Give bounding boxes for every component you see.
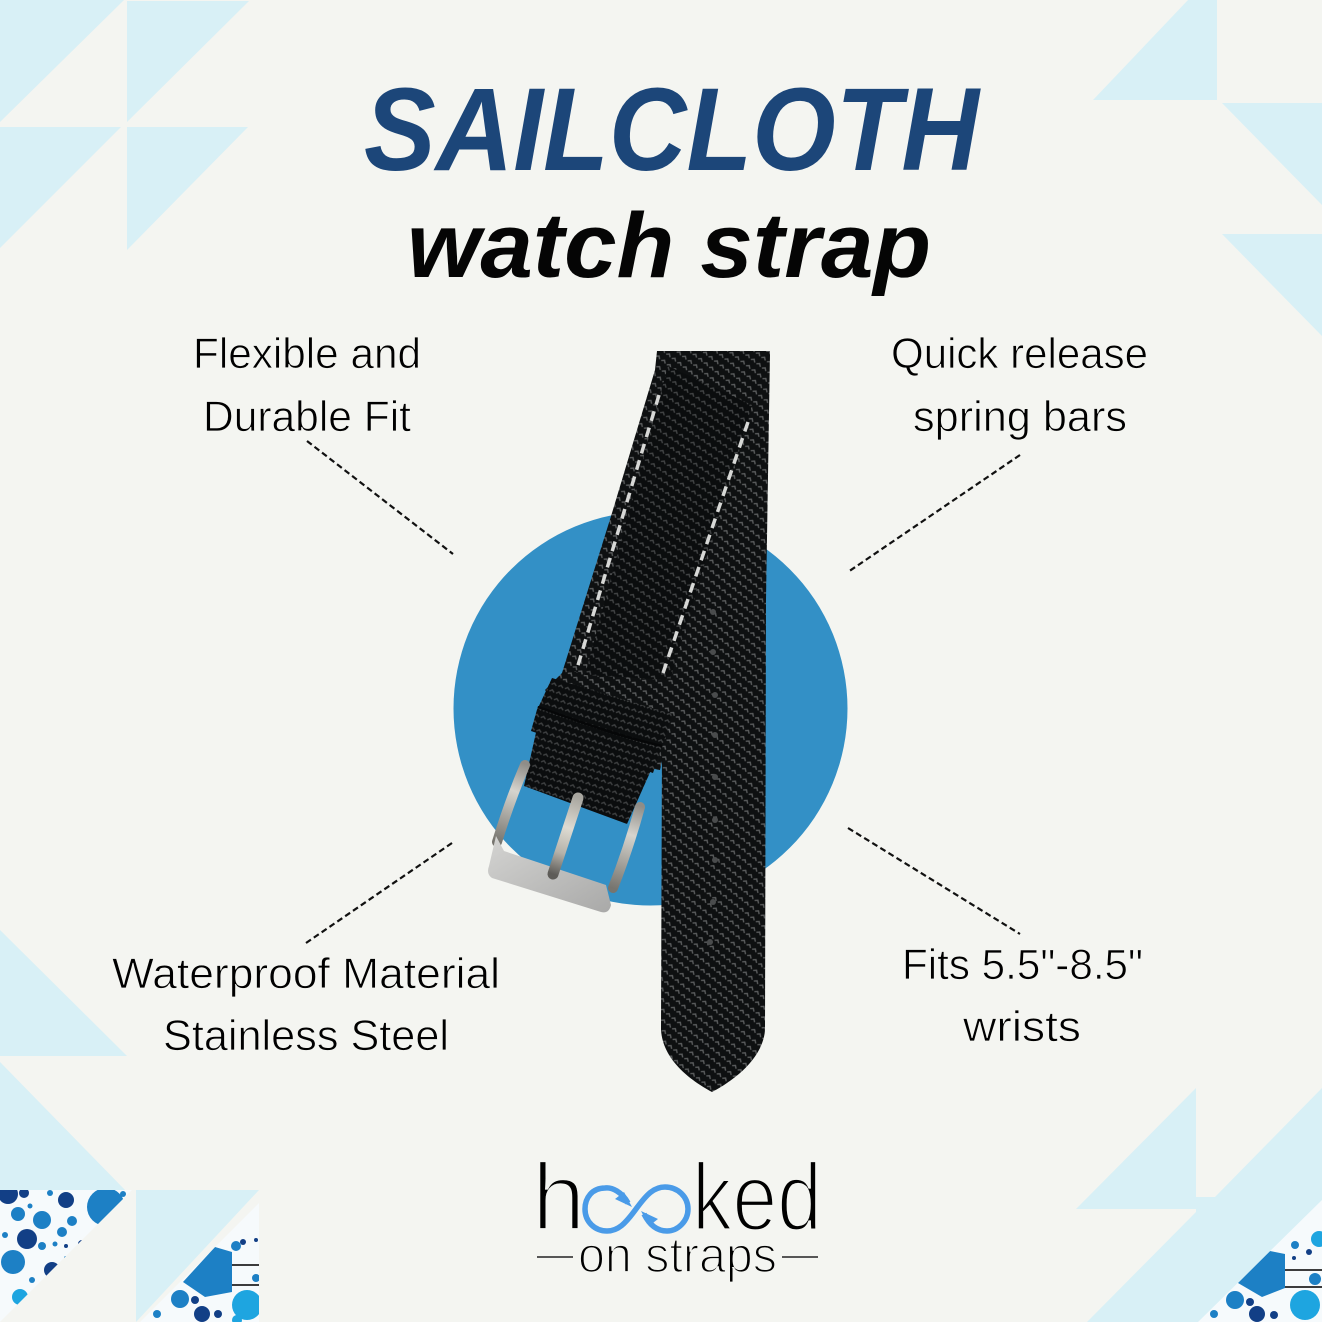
- strap holes: [707, 609, 718, 945]
- leader line: flexible: [307, 441, 453, 554]
- logo wordmark h: h: [532, 1144, 585, 1251]
- callout: waterproof material stainless steel: [112, 950, 500, 1060]
- callout: quick release spring bars: spring bars: [913, 393, 1127, 441]
- darker inner panel: [585, 366, 752, 680]
- buckle left bar: [497, 765, 525, 842]
- paint splatter: bottom left corner: [0, 1184, 132, 1322]
- folded strap piece: [545, 351, 770, 770]
- buckle: [488, 765, 640, 912]
- callout: quick release spring bars: Quick release: [891, 330, 1148, 378]
- title: SAILCLOTH: [364, 64, 982, 196]
- logo infinity hook: [585, 1187, 688, 1231]
- leader line: waterproof: [306, 843, 452, 943]
- callout: quick release spring bars: [891, 330, 1148, 441]
- callout: fits wrists: [902, 941, 1143, 1051]
- contrast stitching: [576, 395, 748, 676]
- quilt triangles: top right: [1093, 0, 1322, 336]
- buckle back plate: [488, 836, 611, 912]
- lower keeper: [531, 706, 662, 773]
- quilt triangles: bottom right: [1076, 1088, 1322, 1322]
- logo rule right: [782, 1256, 818, 1258]
- logo rule left: [537, 1256, 573, 1258]
- callout: waterproof material stainless steel: Stainless Steel: [163, 1012, 449, 1060]
- blue circle behind strap: [454, 512, 848, 906]
- quilt triangles: top left: [0, 0, 249, 250]
- quilt triangles: bottom left: [0, 930, 259, 1322]
- logo tagline: on straps: [578, 1227, 777, 1283]
- callout: flexible and durable fit: [193, 330, 421, 441]
- subtitle: watch strap: [407, 195, 931, 297]
- callout: waterproof material stainless steel: Waterproof Material: [112, 950, 500, 998]
- callout: flexible and durable fit: Flexible and: [193, 330, 421, 378]
- leader line: quick release: [848, 455, 1020, 572]
- buckle right bar: [613, 807, 640, 888]
- strap end under keepers: [524, 728, 652, 824]
- leader line: fits: [848, 828, 1020, 934]
- paint splatter: bottom right corner: [1198, 1200, 1322, 1322]
- watch strap: [488, 351, 770, 1092]
- buckle pin: [553, 798, 578, 874]
- upper keeper: [538, 678, 672, 748]
- long strap piece: [661, 352, 770, 1092]
- logo wordmark ked: ked: [692, 1144, 822, 1251]
- logo: hooked on straps: [532, 1144, 822, 1283]
- keeper gap: [538, 707, 662, 746]
- callout: fits wrists: Fits 5.5"-8.5": [902, 941, 1143, 989]
- callout: flexible and durable fit: Durable Fit: [203, 393, 411, 441]
- callout: fits wrists: wrists: [962, 1003, 1081, 1051]
- paint splatter: bottom centre-left corner: [140, 1203, 262, 1322]
